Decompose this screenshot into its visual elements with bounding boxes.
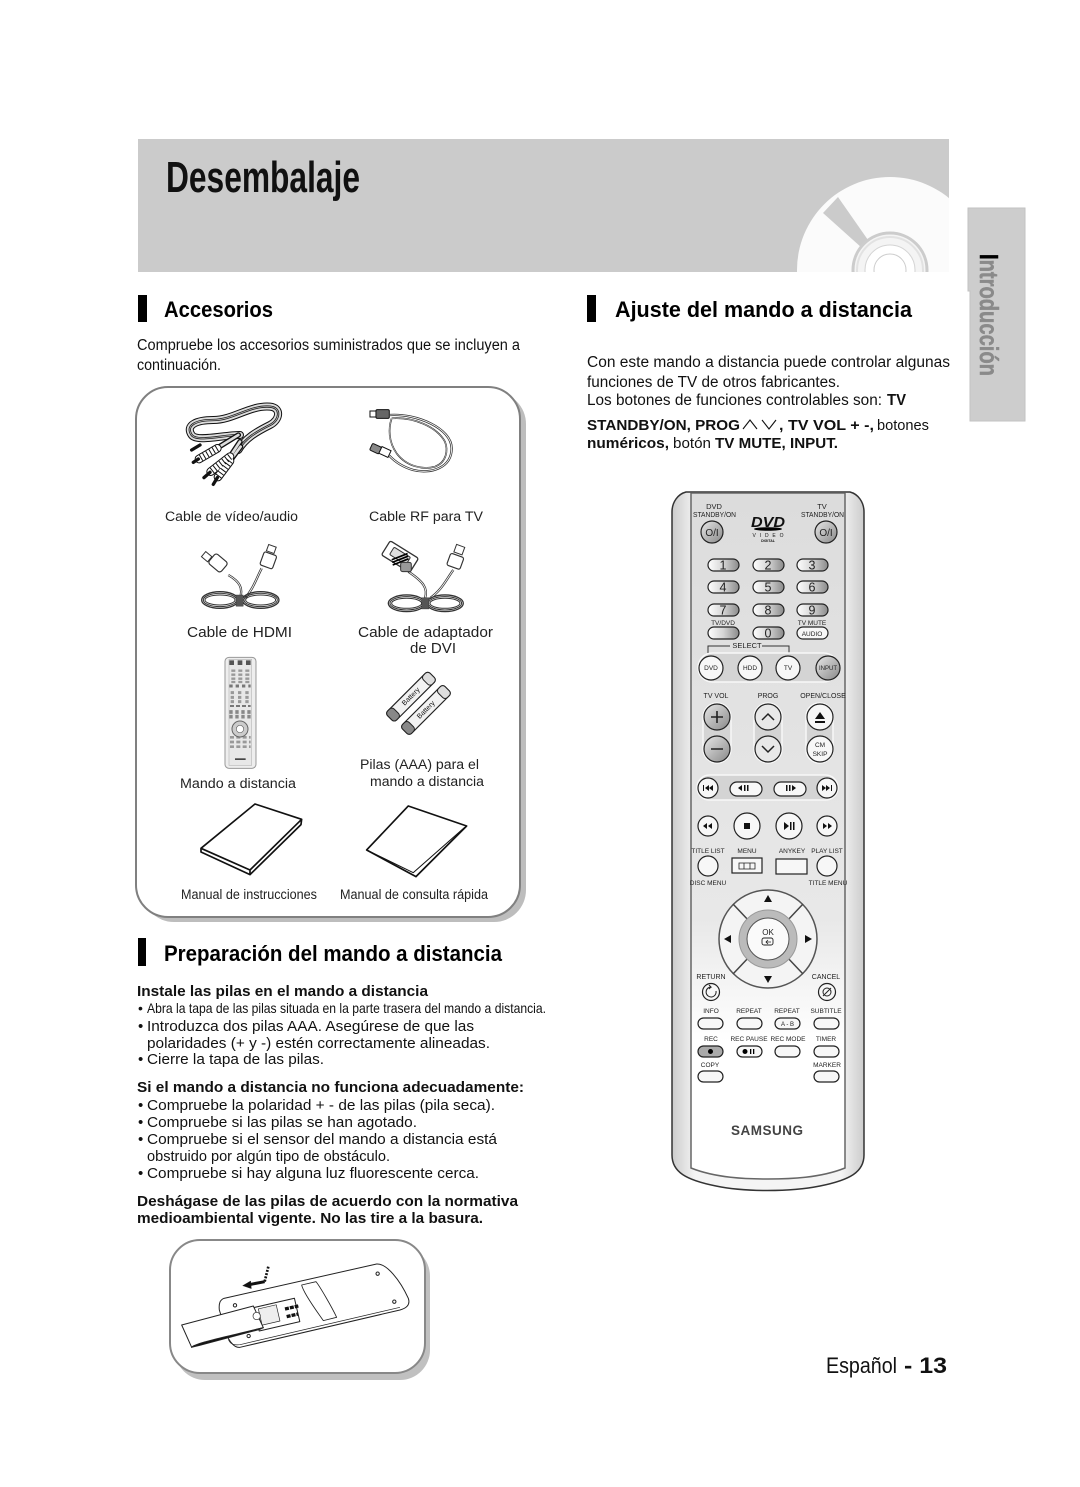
standby labels and buttons: DVD [706,502,722,511]
brand logo: SAMSUNG [731,1123,803,1138]
DVD logo: DIGITAL [761,539,776,543]
caption: pilas AAA: Pilas (AAA) para el [360,757,479,772]
function keys: A - B [781,1022,794,1028]
menu keys: MENU [737,848,757,855]
select keys: TV [784,665,793,672]
number keys: TV/DVD [711,620,735,627]
function keys: SUBTITLE [810,1008,842,1015]
text: accessories intro: continuación. [137,357,221,374]
text: remote setup description: botón [673,435,711,452]
page number: Español [826,1353,897,1378]
standby labels and buttons [693,502,844,543]
page number: - 13 [904,1353,947,1378]
function keys: REC [704,1036,718,1043]
text: disposal note: medioambiental vigente. No las tire a la basura. [137,1211,483,1227]
text: install batteries: • [138,1051,143,1068]
number keys: 5 [765,580,772,594]
number keys [708,558,828,640]
return and cancel keys: CANCEL [812,974,840,981]
icon: video/audio cable [190,407,278,484]
text: install batteries: • [138,1018,143,1035]
skip keys [697,775,838,800]
function keys [698,1008,842,1082]
remote face plate [691,493,845,1179]
standby labels and buttons: O/I [705,528,719,539]
text: remote setup description: Los botones de funciones controlables son: [587,392,882,409]
function keys: MARKER [813,1062,841,1069]
select keys [698,641,840,682]
caption: manual de consulta rapida: Manual de consulta rápida [340,887,488,902]
side tab: Introducción: I ntroducción [974,254,1004,376]
text: troubleshooting: Compruebe si las pilas se han agotado. [147,1114,417,1131]
heading: Ajuste: Ajuste del mando a distancia [615,297,913,322]
icon: HDMI cable [201,544,279,608]
text: troubleshooting [137,1080,524,1182]
menu keys: TITLE MENU [809,880,848,887]
text: troubleshooting: • [138,1114,143,1131]
caption: cable de adaptador de DVI: de DVI [410,640,456,657]
icon: disc [797,177,949,272]
text: disposal note [137,1194,519,1227]
number keys: 4 [720,580,727,594]
number keys: 3 [809,558,816,572]
menu keys: PLAY LIST [811,848,843,855]
icon: batteries: Battery [401,686,422,707]
text: remote setup description [587,354,950,452]
text: install batteries: • [138,1000,143,1016]
caption: cable HDMI: Cable de HDMI [187,624,292,641]
text: troubleshooting: • [138,1131,143,1148]
text: troubleshooting: Compruebe si hay alguna luz fluorescente cerca. [147,1165,479,1182]
volume, prog and open keys: OPEN/CLOSE [800,693,846,700]
function keys: INFO [703,1008,719,1015]
panel: battery installation [170,1240,430,1380]
title banner [138,139,949,272]
arrow: slide lid [243,1267,268,1289]
text: remote setup description: STANDBY/ON, PROG [587,417,740,434]
icon: small remote [225,657,256,768]
volume, prog and open keys: CM [815,742,825,749]
menu keys: TITLE LIST [691,848,725,855]
transport keys [698,813,837,839]
select keys: DVD [704,665,718,672]
function keys: REC MODE [770,1036,806,1043]
text: install batteries: Cierre la tapa de las pilas. [147,1051,324,1068]
standby labels and buttons: TV [817,502,827,511]
caption: manual de instrucciones: Manual de instrucciones [181,887,317,902]
icon: remote back with lid [182,1264,409,1347]
text: troubleshooting: Si el mando a distancia no funciona adecuadamente: [137,1080,524,1096]
text: install batteries: Abra la tapa de las pilas situada en la parte trasera del mando a distancia. [147,1000,546,1016]
side tab: Introducción [968,208,1025,421]
text: troubleshooting: Compruebe si el sensor del mando a distancia está [147,1131,498,1148]
function keys: REPEAT [736,1008,762,1015]
number keys: 7 [720,604,727,618]
icon: batteries [385,671,452,736]
select keys: HDD [743,665,757,672]
caption: cable de adaptador de DVI: Cable de adaptador [358,624,493,641]
title: Desembalaje [166,153,360,202]
number keys: TV MUTE [798,620,827,627]
text: remote setup description: Con este mando a distancia puede controlar algunas [587,354,950,371]
function keys: COPY [701,1062,720,1069]
text: remote setup description: funciones de TV de otros fabricantes. [587,374,840,391]
return and cancel keys [696,974,840,1000]
navigation pad [719,890,817,988]
number keys: 1 [720,558,727,572]
standby labels and buttons: STANDBY/ON [693,510,736,519]
function keys: TIMER [816,1036,836,1043]
icon: batteries: Battery [416,700,437,721]
remote control [672,492,864,1190]
icon: instruction manual [201,804,302,875]
select keys: INPUT [819,666,837,672]
text: troubleshooting: • [138,1165,143,1182]
heading: Preparación: Preparación del mando a distancia [164,941,503,966]
icon: DVI adapter cable [381,541,465,612]
standby labels and buttons: STANDBY/ON [801,510,844,519]
volume, prog and open keys: PROG [758,693,778,700]
number keys: 0 [765,626,772,640]
caption: pilas AAA [360,757,485,789]
page number [826,1353,947,1378]
panel: accessories [136,387,526,922]
text: install batteries [137,984,546,1068]
DVD logo: DVD [751,514,785,531]
menu keys: DISC MENU [690,880,727,887]
caption: cable RF: Cable RF para TV [369,509,483,524]
text: remote setup description: , TV VOL + -, [779,417,874,434]
text: install batteries: Introduzca dos pilas AAA. Asegúrese de que las [147,1018,474,1035]
text: install batteries: polaridades (+ y -) estén correctamente alineadas. [147,1035,490,1052]
heading: Accesorios: Accesorios [164,297,273,322]
text: accessories intro: Compruebe los accesorios suministrados que se incluyen a [137,337,520,354]
number keys: 9 [809,604,816,618]
function keys: REC PAUSE [730,1036,768,1043]
icon: quick guide [367,806,467,877]
text: remote setup description: botones [877,417,929,434]
caption: mando a distancia: Mando a distancia [180,776,297,791]
return and cancel keys: RETURN [696,974,726,981]
icon: RF cable [370,410,452,471]
text: remote setup description: TV [887,392,907,409]
caption: cable de adaptador de DVI [358,624,493,657]
text: accessories intro [137,337,520,374]
text: install batteries: Instale las pilas en el mando a distancia [137,984,429,1000]
DVD logo: VIDEO [752,533,784,539]
menu keys [690,848,848,887]
volume, prog and open keys: SKIP [813,751,827,758]
text: remote setup description: TV MUTE, INPUT. [715,435,838,452]
menu keys: ANYKEY [779,848,806,855]
navigation pad: OK [762,928,774,937]
volume, prog and open keys: TV VOL [704,693,729,700]
text: remote setup description: numéricos, [587,435,669,452]
text: troubleshooting: • [138,1097,143,1114]
caption: pilas AAA: mando a distancia [370,774,485,789]
select keys: SELECT [732,641,762,650]
text: troubleshooting: obstruido por algún tipo de obstáculo. [147,1148,390,1165]
volume, prog and open keys [703,693,846,763]
text: troubleshooting: Compruebe la polaridad + - de las pilas (pila seca). [147,1097,495,1114]
number keys: 8 [765,604,772,618]
standby labels and buttons: O/I [819,528,833,539]
caption: cable de video/audio: Cable de vídeo/audio [165,509,298,524]
number keys: AUDIO [802,631,822,638]
remote body [672,492,864,1190]
DVD logo [751,514,785,543]
text: disposal note: Deshágase de las pilas de acuerdo con la normativa [137,1194,519,1210]
number keys: 6 [809,580,816,594]
number keys: 2 [765,558,772,572]
function keys: REPEAT [774,1008,800,1015]
